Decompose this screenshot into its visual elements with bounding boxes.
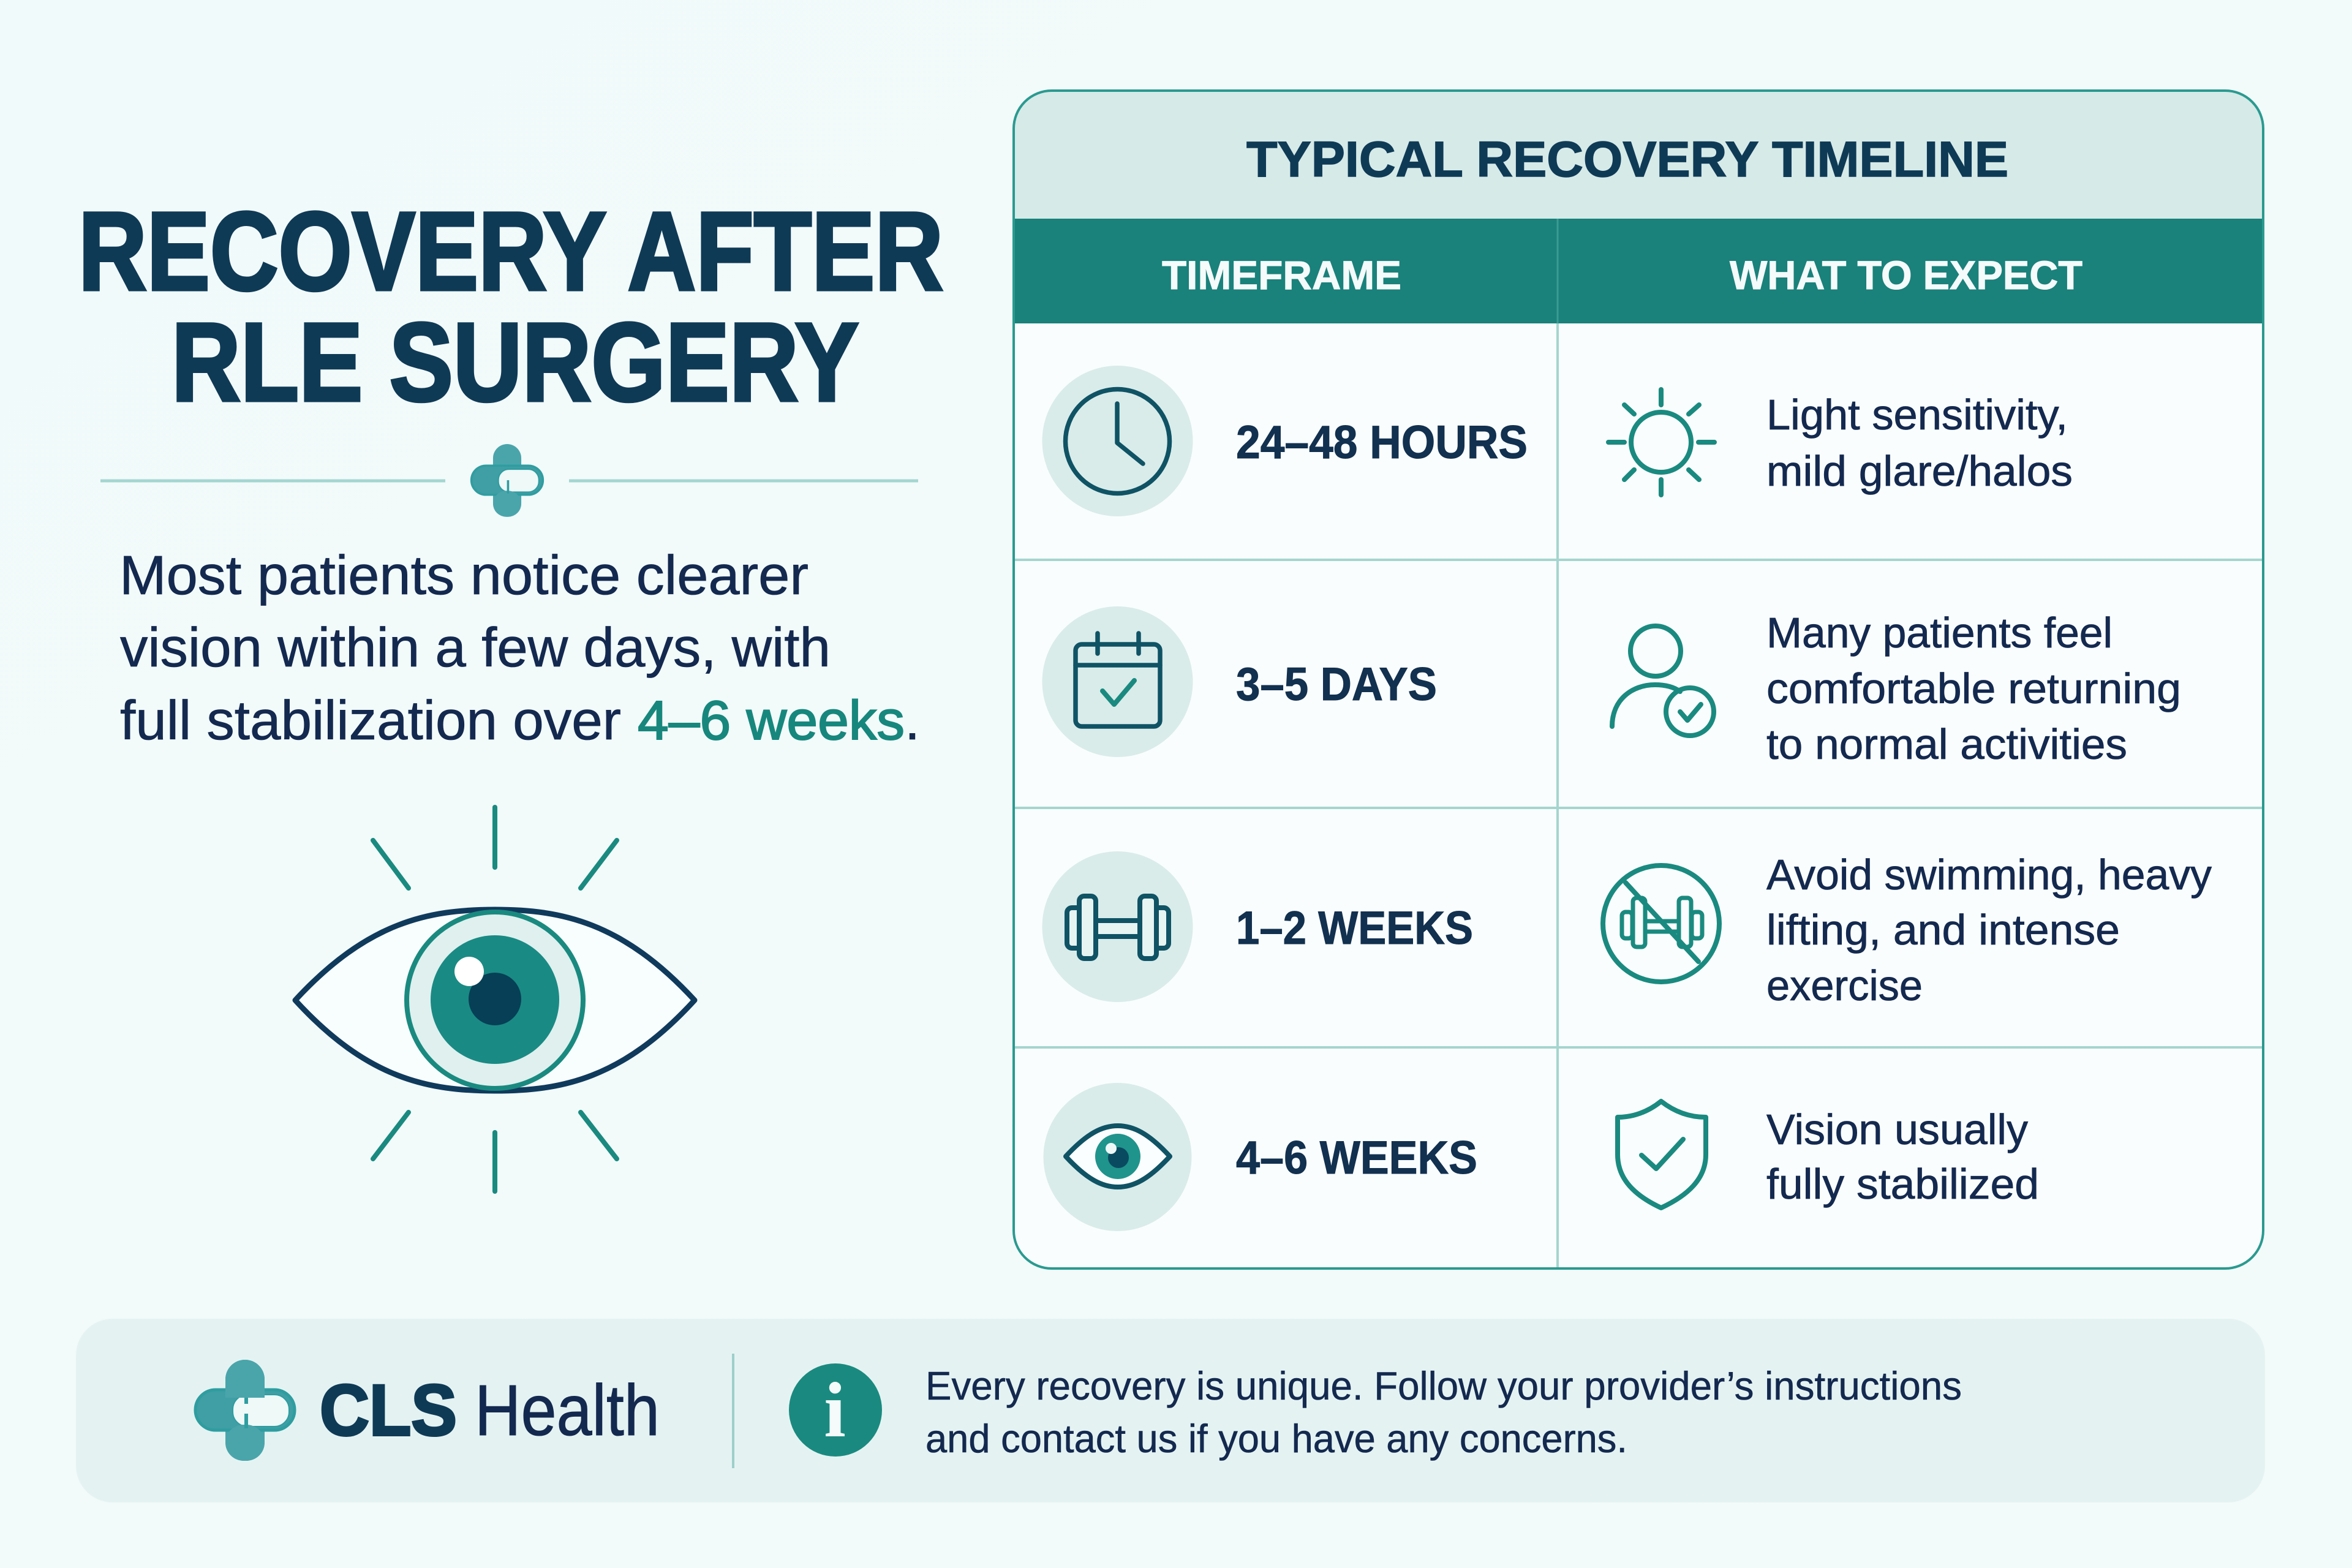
table heading: TYPICAL RECOVERY TIMELINE xyxy=(1246,132,2008,187)
text: many patients: comfortable returning xyxy=(1766,665,2181,712)
panel: footer xyxy=(76,1319,2265,1502)
panel: recovery timeline table xyxy=(1014,91,2263,1268)
intro paragraph: vision within a few days, with xyxy=(120,617,831,679)
label: 4–6 weeks: 4–6 WEEKS xyxy=(1236,1132,1477,1184)
note text xyxy=(925,1363,1962,1461)
text: avoid swimming: lifting, and intense xyxy=(1766,906,2120,954)
text: vision stabilized: fully stabilized xyxy=(1766,1160,2039,1208)
logo: CLS Health: CLS xyxy=(320,1370,457,1451)
text: vision stabilized xyxy=(1766,1106,2039,1208)
icon: sun xyxy=(1608,390,1714,495)
icon: person with check xyxy=(1612,626,1714,736)
text: many patients: to normal activities xyxy=(1766,720,2127,768)
text: light sensitivity xyxy=(1766,391,2073,495)
intro paragraph: Most patients notice clearer xyxy=(119,545,809,606)
text: many patients: Many patients feel xyxy=(1766,609,2113,657)
column header: what to expect: WHAT TO EXPECT xyxy=(1730,252,2082,298)
icon: info xyxy=(789,1363,882,1457)
text: vision stabilized: Vision usually xyxy=(1766,1106,2028,1153)
icon: no heavy lifting xyxy=(1603,865,1719,982)
icon: calendar xyxy=(1042,606,1193,757)
logo: CLS Health xyxy=(195,1360,660,1461)
intro paragraph xyxy=(119,545,920,752)
label: 1–2 weeks: 1–2 WEEKS xyxy=(1236,902,1473,954)
title xyxy=(78,189,943,424)
column header: timeframe: TIMEFRAME xyxy=(1162,252,1401,298)
label: 24–48 hours: 24–48 HOURS xyxy=(1236,417,1528,469)
icon: small eye xyxy=(1044,1083,1192,1231)
intro paragraph: 4–6 weeks xyxy=(638,690,905,752)
label: 3–5 days: 3–5 DAYS xyxy=(1236,658,1437,710)
title: RECOVERY AFTER xyxy=(78,189,943,314)
divider with medical cross xyxy=(100,444,918,517)
text: light sensitivity: Light sensitivity, xyxy=(1766,391,2068,439)
icon: shield with check xyxy=(1618,1101,1706,1208)
icon: large eye with rays xyxy=(295,807,695,1191)
icon: clock xyxy=(1042,366,1193,516)
text: many patients xyxy=(1766,609,2181,768)
intro paragraph: . xyxy=(905,690,920,752)
note text: Every recovery is unique. Follow your provider’s instructions xyxy=(925,1363,1962,1408)
intro paragraph: full stabilization over xyxy=(120,690,621,752)
text: avoid swimming: exercise xyxy=(1766,962,1923,1009)
note text: and contact us if you have any concerns. xyxy=(925,1416,1627,1461)
text: avoid swimming: Avoid swimming, heavy xyxy=(1766,851,2212,899)
text: avoid swimming xyxy=(1766,851,2212,1009)
text: light sensitivity: mild glare/halos xyxy=(1766,447,2073,495)
icon: info: i xyxy=(824,1366,846,1453)
logo: CLS Health: Health xyxy=(475,1370,660,1451)
icon: dumbbell xyxy=(1042,851,1193,1002)
title: RLE SURGERY xyxy=(172,300,859,424)
